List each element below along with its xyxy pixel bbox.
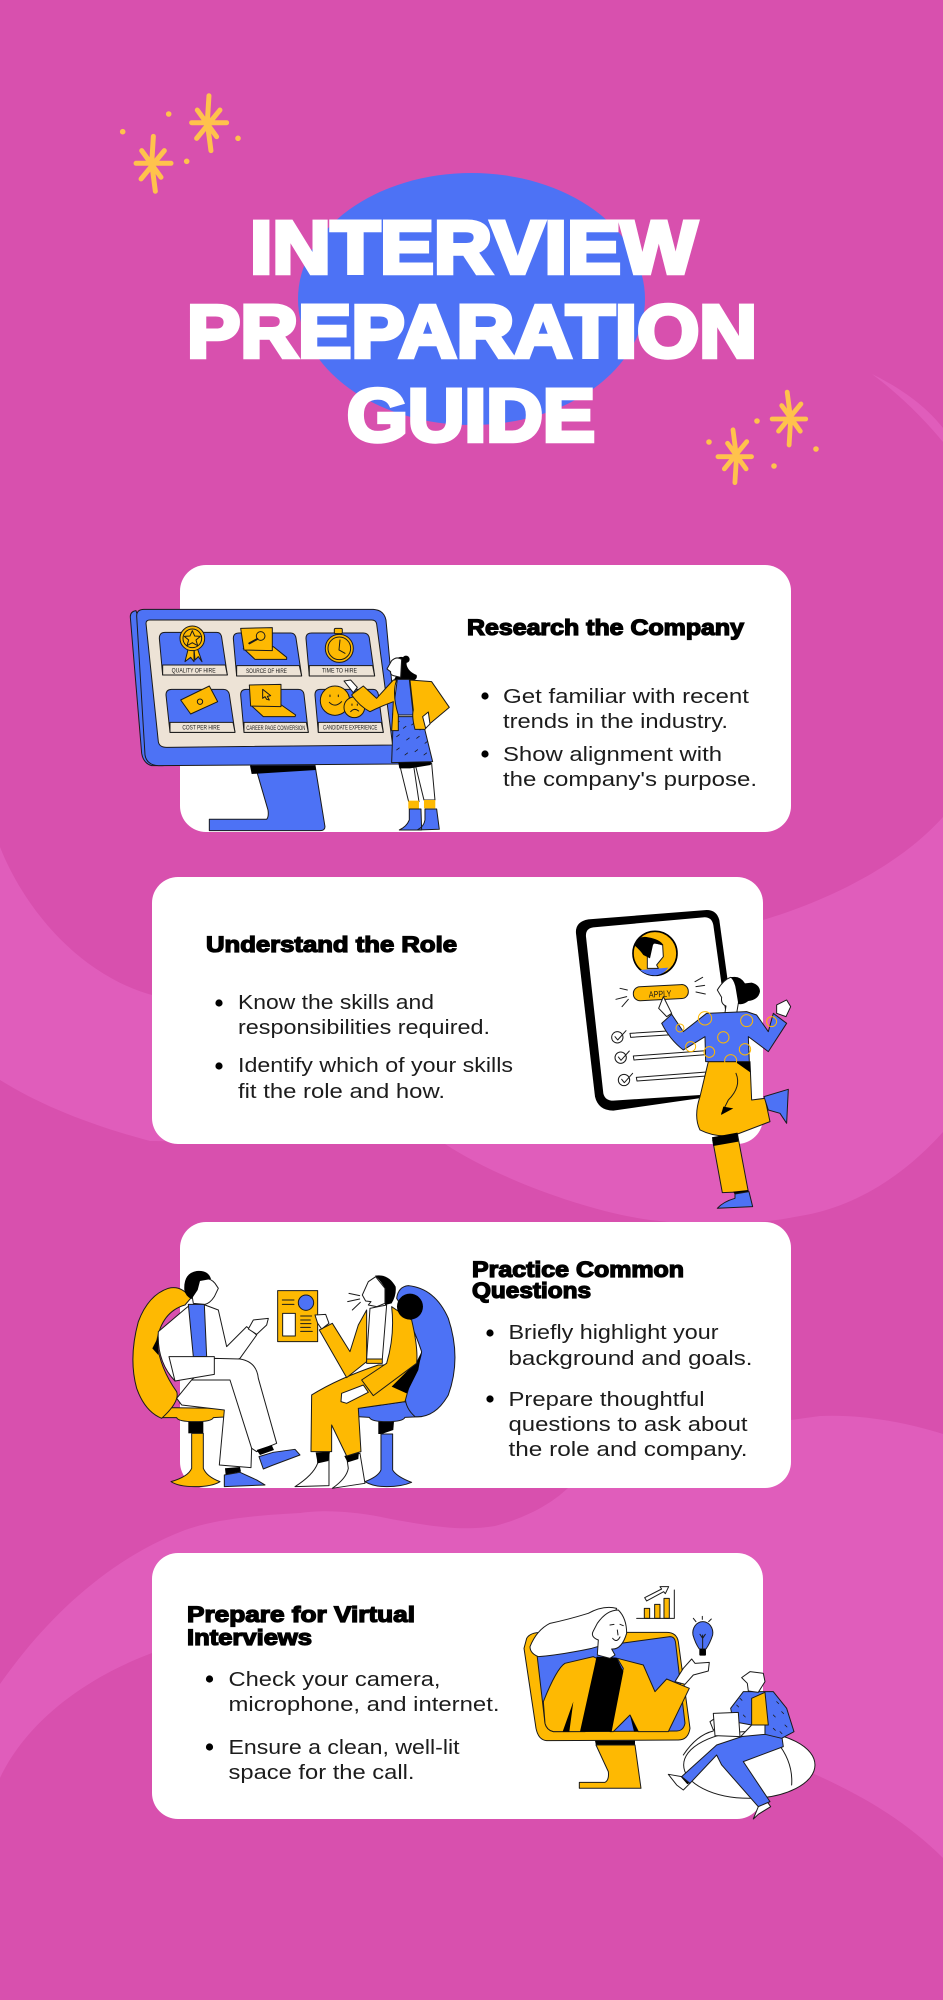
heading: Prepare for Virtual — [187, 1602, 415, 1627]
panel: Research the Company — [130, 565, 791, 832]
title: INTERVIEW — [250, 206, 697, 289]
icon: sparkles right of title — [706, 392, 819, 483]
woman on screen — [530, 1607, 709, 1732]
icon: stopwatch — [325, 628, 353, 662]
man on beanbag — [668, 1672, 815, 1819]
tiles: COST PER HIRE — [182, 724, 220, 731]
bullet list: Know the skills and — [238, 992, 434, 1014]
icon: laptop cursor — [249, 684, 296, 717]
tiles: TIME TO HIRE — [322, 668, 357, 675]
checklist — [612, 1031, 707, 1086]
heading: Practice Common — [472, 1257, 684, 1282]
icon: growth chart — [637, 1587, 674, 1618]
right chair — [357, 1286, 455, 1487]
heading: Research the Company — [467, 615, 745, 640]
bullet list: Briefly highlight your — [508, 1322, 719, 1344]
bullet list: the company's purpose. — [503, 769, 757, 791]
title: PREPARATION — [187, 290, 757, 373]
video screen — [524, 1632, 690, 1788]
man — [152, 1271, 300, 1487]
illustration: two people in interview chairs — [133, 1271, 455, 1488]
bullet list: the role and company. — [508, 1439, 748, 1461]
blue circle behind title — [298, 173, 645, 425]
panel: Understand the Role — [152, 877, 791, 1208]
bullet list — [486, 1322, 752, 1461]
icon: banknote — [181, 686, 218, 714]
bullet list: fit the role and how. — [238, 1081, 445, 1103]
bullet list: Get familiar with recent — [503, 686, 750, 708]
woman — [659, 977, 791, 1208]
bullet list: space for the call. — [228, 1762, 414, 1784]
heading: Interviews — [187, 1625, 312, 1650]
left chair — [133, 1288, 225, 1487]
woman presenter — [344, 656, 449, 830]
icon: laptop magnifier — [241, 628, 287, 659]
heading: Understand the Role — [206, 932, 457, 957]
bullet list: Check your camera, — [228, 1669, 440, 1691]
icon: smiley faces — [320, 686, 365, 718]
illustration: tablet with apply button and woman — [576, 910, 791, 1208]
bullet list: trends in the industry. — [503, 711, 728, 733]
woman — [295, 1275, 423, 1488]
bullet list: responsibilities required. — [238, 1017, 490, 1039]
tiles — [159, 632, 383, 732]
tiles: CAREER PAGE CONVERSION — [246, 725, 306, 732]
bullet list: Show alignment with — [503, 744, 722, 766]
bullet list — [481, 686, 757, 791]
title: GUIDE — [347, 374, 595, 457]
bullet list: Ensure a clean, well-lit — [228, 1737, 460, 1759]
bullet list: background and goals. — [508, 1348, 752, 1370]
bullet list: microphone, and internet. — [228, 1694, 500, 1716]
bullet list: Identify which of your skills — [238, 1055, 513, 1077]
document — [278, 1291, 318, 1342]
apply button — [616, 977, 705, 1007]
avatar — [633, 931, 677, 975]
panel: Practice Common Questions — [133, 1222, 791, 1488]
panel: Prepare for Virtual Interviews — [152, 1553, 815, 1819]
heading — [187, 1602, 415, 1650]
bullet list — [206, 1669, 500, 1784]
bullet list: Prepare thoughtful — [508, 1389, 704, 1411]
heading: Questions — [472, 1278, 591, 1303]
tiles: QUALITY OF HIRE — [172, 667, 216, 674]
heading — [472, 1257, 684, 1303]
illustration: video call screen and man on beanbag — [524, 1587, 815, 1819]
tiles: CANDIDATE EXPERIENCE — [323, 724, 377, 731]
icon: medal — [180, 626, 205, 662]
illustration: monitor with metrics and woman — [130, 609, 449, 831]
icon: sparkles top left — [120, 96, 241, 191]
apply button: APPLY — [648, 988, 672, 1000]
tiles: SOURCE OF HIRE — [246, 668, 287, 675]
bullet list: questions to ask about — [508, 1414, 748, 1436]
bullet list — [215, 992, 513, 1103]
title — [187, 206, 757, 457]
icon: light bulb — [693, 1616, 713, 1656]
header: sparkles, circle and title — [120, 96, 819, 483]
